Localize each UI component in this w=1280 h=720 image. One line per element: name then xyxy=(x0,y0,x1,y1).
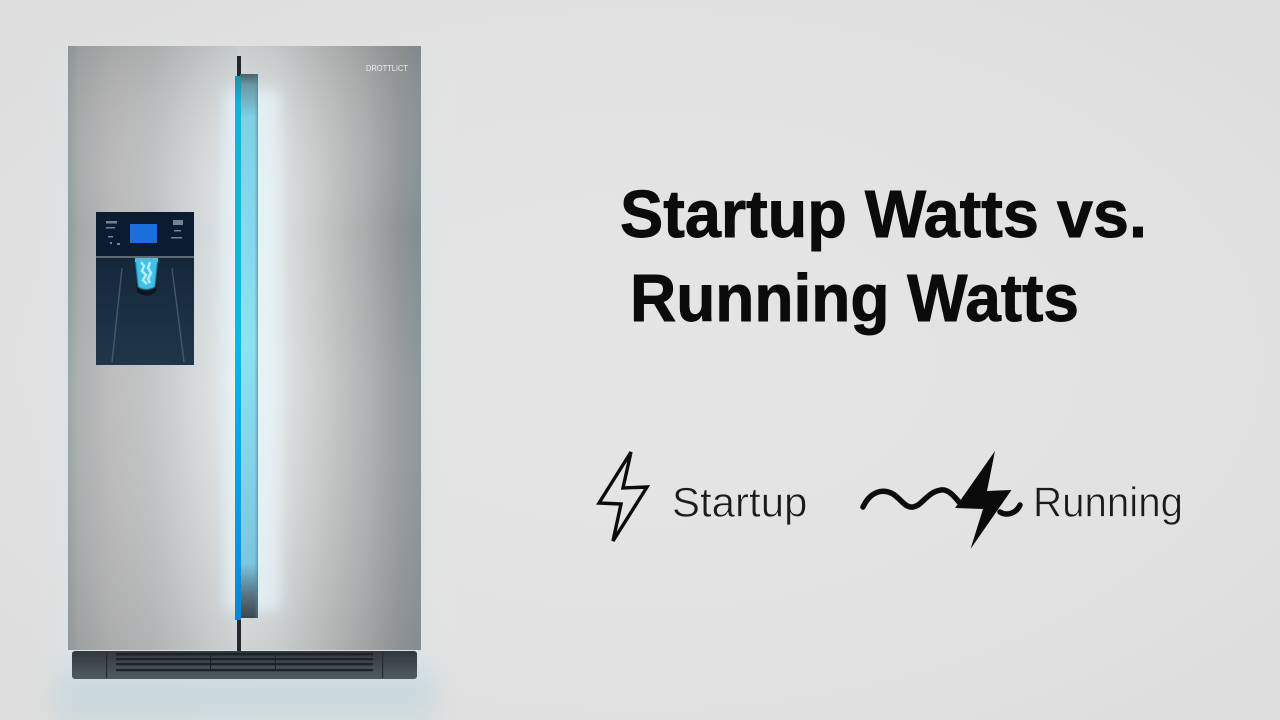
control panel xyxy=(96,212,194,257)
brand label: DROTTLICT xyxy=(366,63,408,73)
blue light strip xyxy=(235,74,258,620)
blue display xyxy=(130,224,157,243)
title: Startup Watts vs. xyxy=(620,177,1147,252)
dispenser divider xyxy=(96,256,194,258)
icon: wave with solid lightning bolt xyxy=(863,451,1020,549)
water glass xyxy=(134,258,159,296)
fridge glow xyxy=(62,60,427,690)
door shading xyxy=(68,46,421,650)
label: running: Running xyxy=(1033,478,1183,526)
title: Running Watts xyxy=(630,261,1079,336)
lower door gap xyxy=(237,616,241,651)
blue light glow xyxy=(226,90,280,610)
panel buttons xyxy=(106,220,183,245)
dispenser light lines xyxy=(112,268,184,362)
upper door gap xyxy=(237,56,241,76)
base grille xyxy=(72,651,417,679)
legend: running xyxy=(863,451,1183,549)
left door xyxy=(68,46,238,650)
icon: outline lightning bolt xyxy=(599,452,647,541)
legend: startup xyxy=(599,452,807,541)
title xyxy=(620,177,1147,336)
label: startup: Startup xyxy=(672,478,807,526)
floor glow xyxy=(55,676,435,720)
refrigerator xyxy=(55,46,435,720)
right door xyxy=(238,46,421,650)
water dispenser xyxy=(96,212,194,365)
